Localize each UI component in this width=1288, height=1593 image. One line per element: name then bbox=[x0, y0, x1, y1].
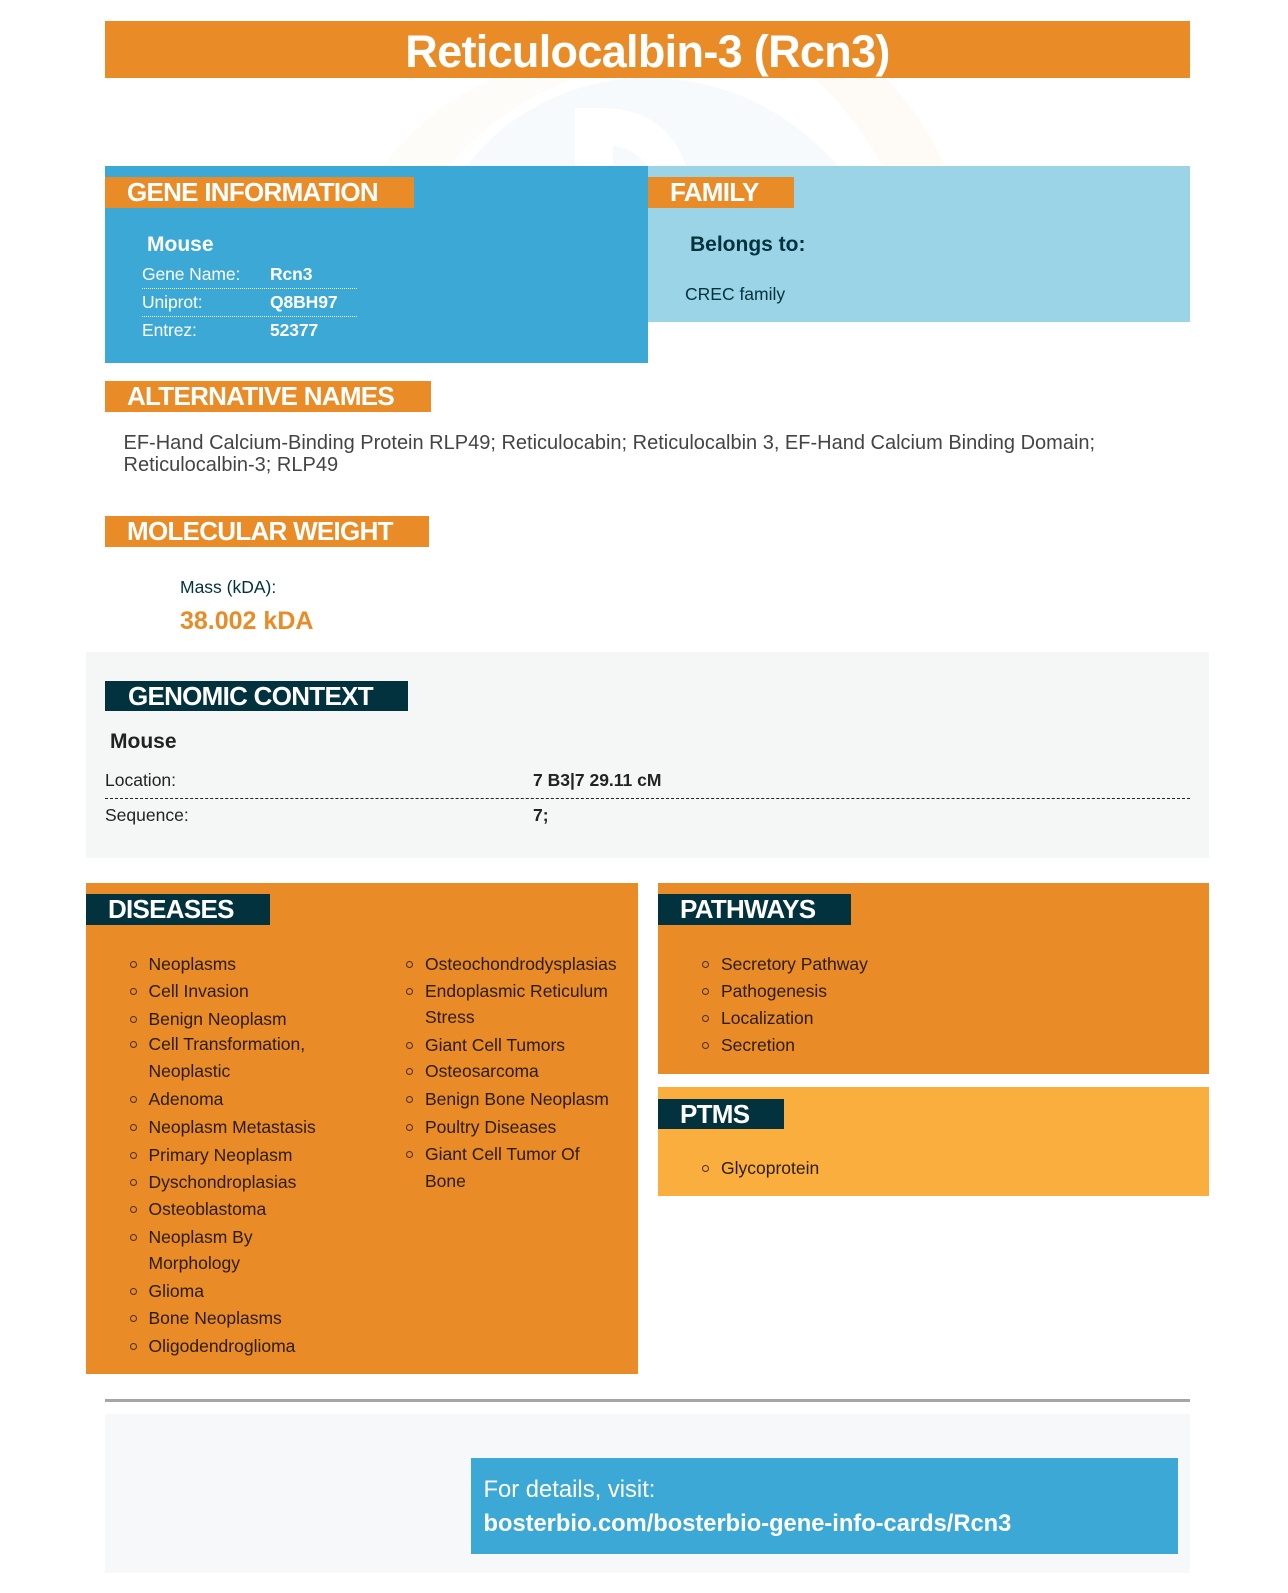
gene details table: Q8BH97 bbox=[270, 292, 338, 312]
sequence row: Sequence: bbox=[105, 805, 189, 825]
molecular weight value bbox=[180, 577, 313, 635]
disease list column 2: Poultry Diseases bbox=[425, 1117, 556, 1137]
heading: family bbox=[648, 177, 794, 208]
mass label: Mass (kDA): bbox=[180, 577, 276, 597]
alternative names text: EF-Hand Calcium-Binding Protein RLP49; Reticulocabin; Reticulocalbin 3, EF-Hand Calcium Binding Domain; Reticulocalbin-3; RLP49 bbox=[124, 432, 1095, 476]
disease list column 1: Cell Invasion bbox=[148, 981, 249, 1001]
gene details table bbox=[142, 264, 357, 340]
panel: diseases bbox=[86, 883, 638, 1374]
disease list column 1: Osteoblastoma bbox=[148, 1199, 266, 1219]
footer divider bbox=[105, 1399, 1190, 1402]
gene details table: Gene Name: bbox=[142, 264, 240, 284]
disease list column 1: Dyschondroplasias bbox=[148, 1172, 296, 1192]
heading: ptms bbox=[658, 1099, 784, 1129]
disease list column 1: Glioma bbox=[148, 1281, 204, 1301]
panel: ptms bbox=[658, 1087, 1209, 1196]
disease list column 1: Bone Neoplasms bbox=[148, 1308, 282, 1328]
panel: family bbox=[648, 166, 1190, 322]
mass value: 38.002 kDA bbox=[180, 607, 313, 635]
disease list column 1: Neoplastic bbox=[148, 1061, 230, 1081]
sequence row bbox=[105, 805, 549, 825]
species label: Mouse bbox=[110, 730, 177, 753]
disease list column 1: Neoplasms bbox=[148, 954, 236, 974]
panel: gene information bbox=[105, 166, 648, 363]
heading: ptms: PTMS bbox=[680, 1099, 749, 1129]
location row: Location: bbox=[105, 770, 176, 790]
location row bbox=[105, 768, 1190, 799]
disease list column 2: Giant Cell Tumors bbox=[425, 1035, 565, 1055]
family value: CREC family bbox=[685, 284, 785, 304]
disease list column 2: Stress bbox=[425, 1007, 475, 1027]
belongs to label: Belongs to: bbox=[690, 233, 806, 256]
heading: molecular weight: MOLECULAR WEIGHT bbox=[127, 516, 393, 546]
disease list column 1: Oligodendroglioma bbox=[148, 1336, 295, 1356]
disease list column 2: Bone bbox=[425, 1171, 466, 1191]
callout: details link bbox=[471, 1458, 1178, 1554]
panel: pathways bbox=[658, 883, 1209, 1074]
disease list column 1: Benign Neoplasm bbox=[148, 1009, 287, 1029]
heading: pathways: PATHWAYS bbox=[680, 894, 815, 924]
disease list column 1: Adenoma bbox=[148, 1089, 223, 1109]
disease list column 2: Benign Bone Neoplasm bbox=[425, 1089, 609, 1109]
disease list column 2: Endoplasmic Reticulum bbox=[425, 981, 608, 1001]
disease list column 1: Cell Transformation, bbox=[148, 1034, 305, 1054]
disease list column 1: Neoplasm Metastasis bbox=[148, 1117, 316, 1137]
location row: 7 B3|7 29.11 cM bbox=[533, 770, 661, 790]
gene details table: Entrez: bbox=[142, 320, 197, 340]
pathways list: Pathogenesis bbox=[721, 981, 827, 1001]
heading: alternative names: ALTERNATIVE NAMES bbox=[127, 381, 394, 411]
heading: family: FAMILY bbox=[670, 177, 759, 207]
disease list column 2 bbox=[406, 954, 617, 1191]
gene details table: 52377 bbox=[270, 320, 318, 340]
pathways list: Secretion bbox=[721, 1035, 795, 1055]
gene details table: Rcn3 bbox=[270, 264, 312, 284]
heading: diseases: DISEASES bbox=[108, 894, 234, 924]
pathways list: Localization bbox=[721, 1008, 813, 1028]
disease list column 1: Neoplasm By bbox=[148, 1227, 253, 1247]
heading: gene information: GENE INFORMATION bbox=[127, 177, 378, 207]
disease list column 2: Osteochondrodysplasias bbox=[425, 954, 617, 974]
ptms list: Glycoprotein bbox=[721, 1158, 819, 1178]
disease list column 1: Morphology bbox=[148, 1253, 240, 1273]
panel: genomic context bbox=[86, 652, 1209, 858]
disease list column 1 bbox=[130, 954, 316, 1356]
pathways list: Secretory Pathway bbox=[721, 954, 868, 974]
pathways list bbox=[702, 954, 868, 1055]
disease list column 2: Giant Cell Tumor Of bbox=[425, 1144, 580, 1164]
sequence row: 7; bbox=[533, 805, 549, 825]
callout url: bosterbio.com/bosterbio-gene-info-cards/Rcn3 bbox=[484, 1511, 1011, 1537]
heading: diseases bbox=[86, 894, 270, 925]
species label: Mouse bbox=[147, 233, 214, 256]
disease list column 2: Osteosarcoma bbox=[425, 1061, 539, 1081]
gene details table: Uniprot: bbox=[142, 292, 202, 312]
watermark logo bbox=[468, 78, 944, 166]
disease list column 1: Primary Neoplasm bbox=[148, 1145, 292, 1165]
callout label: For details, visit: bbox=[484, 1476, 655, 1503]
heading: pathways bbox=[658, 894, 851, 925]
title banner: Reticulocalbin-3 (Rcn3) bbox=[405, 26, 890, 77]
title banner bbox=[105, 21, 1190, 78]
panel: footer bbox=[105, 1414, 1190, 1573]
heading: genomic context: GENOMIC CONTEXT bbox=[128, 681, 373, 711]
